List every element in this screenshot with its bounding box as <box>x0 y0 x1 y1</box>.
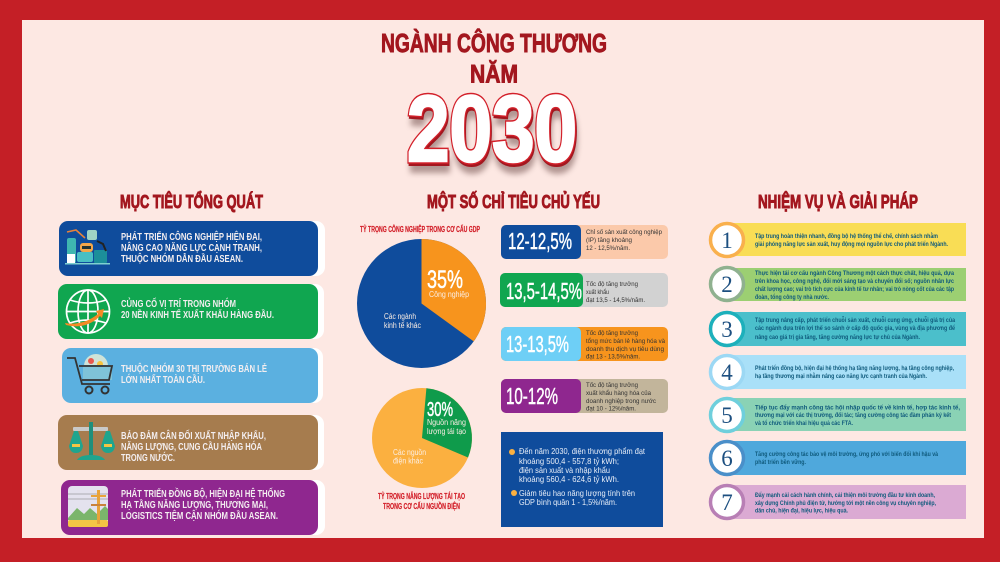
goal 5 text <box>121 486 285 522</box>
panel: goal 3 retail <box>62 348 323 403</box>
task 6: Tăng cường công tác bảo vệ môi trường, ứng phó với biến đổi khí hậu và <box>755 450 938 458</box>
icon: shopping cart <box>67 354 112 394</box>
panel: goal 4 balance <box>58 415 324 470</box>
task 7: dân chủ, hiện đại, hiệu lực, hiệu quả. <box>755 508 848 514</box>
stat: retail growth <box>501 327 668 361</box>
task 2: trên khoa học, công nghệ, đổi mới sáng tạo và chuyển đổi số; nguồn nhân lực <box>755 276 954 285</box>
task 5: 5 <box>721 403 733 428</box>
big year 2030: 2030 <box>407 76 577 181</box>
chart caption: renewable share: TỶ TRỌNG NĂNG LƯỢNG TÁI TẠO <box>378 492 465 501</box>
goal 4 text: BẢO ĐẢM CÂN ĐỐI XUẤT NHẬP KHẨU, <box>121 428 266 442</box>
task 4: 4 <box>721 360 733 385</box>
stat: domestic enterprise export growth <box>501 379 668 413</box>
stat: domestic enterprise export growth: đạt 10 - 12%/năm. <box>586 406 636 412</box>
panel: goal 2 export <box>58 284 324 339</box>
title <box>381 28 607 88</box>
goal 1 text: PHÁT TRIỂN CÔNG NGHIỆP HIỆN ĐẠI, <box>121 230 262 243</box>
task 3 <box>710 312 966 346</box>
stat: domestic enterprise export growth: doanh nghiệp trong nước <box>586 398 657 405</box>
stat: industrial production index <box>501 225 668 259</box>
stat: industrial production index: 12 - 12,5%/năm. <box>586 245 630 252</box>
icon: globe with arrow <box>65 290 110 333</box>
stat: retail growth: doanh thu dịch vụ tiêu dùng <box>586 346 664 353</box>
big year 2030: 2030 <box>407 76 577 181</box>
stat: domestic enterprise export growth: 10-12% <box>506 383 558 409</box>
pie chart: renewable energy share: lượng tái tạo <box>427 427 467 436</box>
stat: domestic enterprise export growth: Tốc độ tăng trưởng <box>586 380 638 389</box>
pie chart: renewable energy share: Các nguồn <box>393 448 426 457</box>
task 5: Tiếp tục đẩy mạnh công tác hội nhập quốc tế về kinh tế, hợp tác kinh tế, <box>755 402 960 412</box>
pie chart: industry share of GDP: Công nghiệp <box>429 290 470 299</box>
task 3: 3 <box>721 317 733 342</box>
chart title: GDP share: TỶ TRỌNG CÔNG NGHIỆP TRONG CƠ CẤU GDP <box>360 224 480 234</box>
stat: retail growth: tổng mức bán lẻ hàng hóa và <box>586 337 665 345</box>
goal 1 text: NÂNG CAO NĂNG LỰC CẠNH TRANH, <box>121 241 262 254</box>
stat: export growth: 13,5-14,5% <box>506 278 582 304</box>
chart caption: renewable share: TRONG CƠ CẤU NGUỒN ĐIỆN <box>383 501 460 511</box>
goal 1 text: THUỘC NHÓM DẪN ĐẦU ASEAN. <box>121 252 243 265</box>
goal 5 text: PHÁT TRIỂN ĐỒNG BỘ, HIỆN ĐẠI HỆ THỐNG <box>121 486 285 500</box>
pie chart: industry share of GDP: Các ngành <box>384 312 416 321</box>
heading: general goals: MỤC TIÊU TỔNG QUÁT <box>120 191 263 212</box>
panel: electricity callout: Giảm tiêu hao năng lượng tính trên <box>519 488 635 498</box>
goal 2 text: 20 NỀN KINH TẾ XUẤT KHẨU HÀNG ĐẦU. <box>121 308 274 321</box>
stat: industrial production index: Chỉ số sản xuất công nghiệp <box>586 227 662 236</box>
stat: retail growth: đạt 13 - 13,5%/năm. <box>586 354 640 360</box>
goal 3 text: THUỘC NHÓM 30 THỊ TRƯỜNG BÁN LẺ <box>121 362 267 375</box>
stat: industrial production index: 12-12,5% <box>508 228 572 254</box>
stat: export growth: xuất khẩu <box>586 287 609 296</box>
task 6: 6 <box>721 446 733 471</box>
goal 5 text: LOGISTICS TIỆM CẬN NHÓM ĐẦU ASEAN. <box>121 509 278 522</box>
panel: electricity callout: Đến năm 2030, điện thương phẩm đạt <box>519 446 646 456</box>
goal 4 text: NĂNG LƯỢNG, CUNG CẦU HÀNG HÓA <box>121 440 262 453</box>
panel: electricity callout: khoảng 500,4 - 557,8 tỷ kWh; <box>519 456 619 466</box>
task 7: 7 <box>721 490 733 515</box>
goal 1 text <box>121 230 262 265</box>
stat: retail growth: Tốc độ tăng trưởng <box>586 328 638 337</box>
heading: tasks and solutions: NHIỆM VỤ VÀ GIẢI PHÁP <box>758 191 918 212</box>
pie chart: renewable energy share <box>372 388 472 488</box>
goal 2 text: CỦNG CỐ VỊ TRÍ TRONG NHÓM <box>121 296 236 310</box>
task 3: các ngành dựa trên lợi thế so sánh ở cấp độ quốc gia, vùng và địa phương để <box>755 324 955 332</box>
task 3: Tập trung nâng cấp, phát triển chuỗi sản xuất, chuỗi cung ứng, chuỗi giá trị của <box>755 315 955 324</box>
task 6 <box>710 441 966 475</box>
task 4 <box>710 355 966 389</box>
pie chart: industry share of GDP: kinh tế khác <box>384 321 421 330</box>
goal 3 text: LỚN NHẤT TOÀN CẦU. <box>121 373 205 386</box>
panel: goal 1 industry <box>59 221 325 276</box>
task 4: hạ tầng thương mại nhằm nâng cao năng lực cạnh tranh của Ngành. <box>755 371 927 380</box>
task 5 <box>710 398 966 432</box>
stat: industrial production index: (IP) tăng khoảng <box>586 237 632 244</box>
task 1: giải phóng năng lực sản xuất, huy động mọi nguồn lực cho phát triển Ngành. <box>755 239 948 248</box>
stat: domestic enterprise export growth: xuất khẩu hàng hóa của <box>586 388 651 397</box>
panel: electricity callout: khoảng 560,4 - 624,6 tỷ kWh. <box>519 474 619 484</box>
big year 2030: 2030 <box>408 78 578 184</box>
big year 2030: 2030 <box>409 86 579 191</box>
panel: electricity callout: điện sản xuất và nhập khẩu <box>519 465 610 475</box>
stat: export growth: Tốc độ tăng trưởng <box>586 279 638 288</box>
pie chart: renewable energy share: Nguồn năng <box>427 418 466 427</box>
task 1: 1 <box>721 228 733 253</box>
pie chart: industry share of GDP <box>357 239 486 368</box>
goal 3 text <box>121 362 267 386</box>
icon: balance scale <box>69 422 115 460</box>
icon: power line landscape <box>68 486 108 527</box>
panel: electricity callout <box>501 432 663 527</box>
task 4: Phát triển đồng bộ, hiện đại hệ thống hạ tầng năng lượng, hạ tầng công nghiệp, <box>755 363 954 372</box>
heading: key indicators: MỘT SỐ CHỈ TIÊU CHỦ YẾU <box>427 191 600 212</box>
goal 2 text <box>121 296 274 321</box>
panel: electricity callout: GDP bình quân 1 - 1,5%/năm. <box>519 497 617 507</box>
pie chart: renewable energy share: 30% <box>427 399 453 421</box>
task 6: phát triển bền vững. <box>755 457 806 466</box>
task 2: Thực hiện tái cơ cấu ngành Công Thương một cách thực chất, hiệu quả, dựa <box>755 269 954 277</box>
stat: retail growth: 13-13,5% <box>506 331 569 357</box>
goal 4 text: TRONG NƯỚC. <box>121 451 175 464</box>
task 1 <box>710 223 966 256</box>
task 2: chất lượng cao; vai trò tích cực của kinh tế tư nhân; vai trò nòng cốt của các tập <box>755 285 954 293</box>
task 7 <box>710 485 966 519</box>
task 1: Tập trung hoàn thiện nhanh, đồng bộ hệ thống thể chế, chính sách nhằm <box>755 231 938 240</box>
goal 4 text <box>121 428 266 464</box>
task 5: và tổ chức triển khai hiệu quả các FTA. <box>755 419 853 427</box>
task 2 <box>710 268 966 301</box>
panel: goal 5 infrastructure <box>61 480 325 535</box>
task 7: Đẩy mạnh cải cách hành chính, cải thiện môi trường đầu tư kinh doanh, <box>755 490 935 499</box>
icon: robot arms <box>65 230 110 264</box>
title: NGÀNH CÔNG THƯƠNG <box>381 28 607 58</box>
goal 5 text: HẠ TẦNG NĂNG LƯỢNG, THƯƠNG MẠI, <box>121 498 268 511</box>
task 2: đoàn, tổng công ty nhà nước. <box>755 293 829 301</box>
stat: export growth <box>500 273 668 307</box>
title: NĂM <box>470 60 518 88</box>
stat: export growth: đạt 13,5 - 14,5%/năm. <box>586 297 645 304</box>
pie chart: renewable energy share: điện khác <box>393 456 423 466</box>
task 2: 2 <box>721 272 733 297</box>
pie chart: industry share of GDP: 35% <box>427 266 463 294</box>
task 7: xây dựng Chính phủ điện tử, hướng tới một nền công vụ chuyên nghiệp, <box>755 498 936 507</box>
task 5: thương mại với các thị trường, đối tác; tăng cường công tác đàm phán ký kết <box>755 411 952 419</box>
task 3: nâng cao giá trị gia tăng, tăng cường năng lực tự chủ của Ngành. <box>755 334 920 341</box>
chart caption: renewable share <box>378 492 465 511</box>
